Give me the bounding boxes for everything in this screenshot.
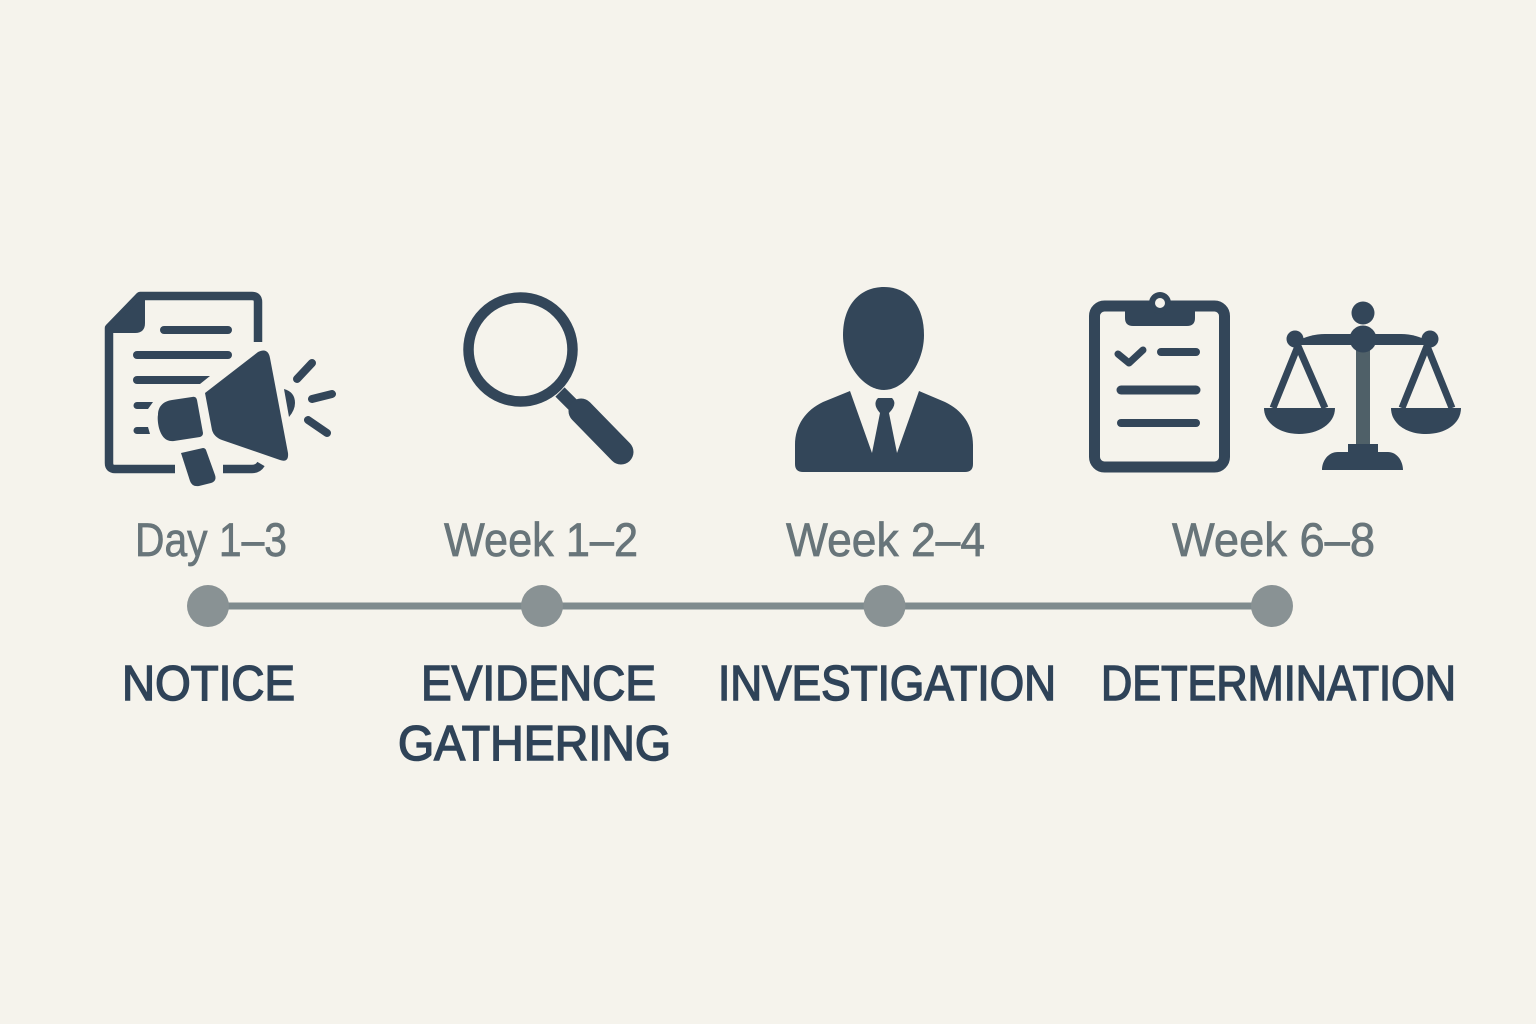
- icon: clipboard checklist: [1094, 292, 1224, 467]
- icon: balance scales: [1264, 302, 1461, 470]
- time label: Day 1–3: Day 1–3: [135, 513, 287, 566]
- timeline with four milestones: [187, 585, 1293, 627]
- step label: Evidence Gathering: [398, 657, 671, 771]
- step label: Evidence Gathering: GATHERING: [398, 717, 671, 771]
- icon: magnifying glass: [468, 298, 621, 452]
- step label: Investigation: INVESTIGATION: [718, 657, 1056, 711]
- time label: Week 1–2: Week 1–2: [444, 513, 638, 566]
- step label: Notice: NOTICE: [122, 657, 295, 711]
- time label: Week 2–4: Week 2–4: [786, 513, 985, 566]
- step label: Evidence Gathering: EVIDENCE: [421, 657, 656, 711]
- time label: Week 6–8: Week 6–8: [1172, 513, 1375, 566]
- step label: Determination: DETERMINATION: [1101, 657, 1456, 711]
- icon: person in suit: [795, 287, 973, 472]
- icon: document with megaphone: [108, 296, 332, 486]
